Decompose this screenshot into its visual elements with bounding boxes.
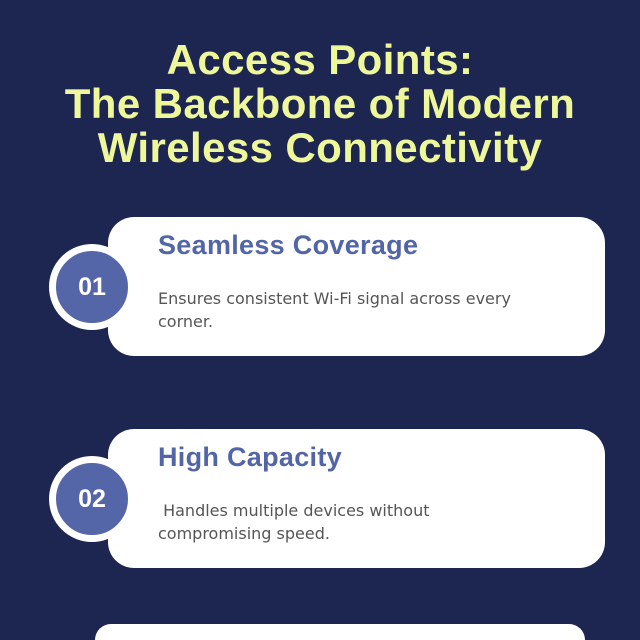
heading 2: High Capacity (158, 442, 342, 472)
badge 02 (49, 456, 135, 542)
title: Wireless Connectivity (98, 124, 542, 171)
title: The Backbone of Modern (65, 80, 575, 127)
card 2 (108, 429, 605, 568)
badge 01: 01 (78, 273, 106, 301)
heading 1: Seamless Coverage (158, 230, 418, 260)
card 3 (95, 624, 585, 640)
card 1 (108, 217, 605, 356)
badge 01 (49, 244, 135, 330)
title: Access Points: (167, 36, 473, 83)
title (65, 36, 575, 171)
badge 02: 02 (78, 485, 106, 513)
text 1: Ensures consistent Wi-Fi signal across every corner. (158, 289, 511, 331)
text 2: Handles multiple devices without compromising speed. (158, 501, 429, 543)
